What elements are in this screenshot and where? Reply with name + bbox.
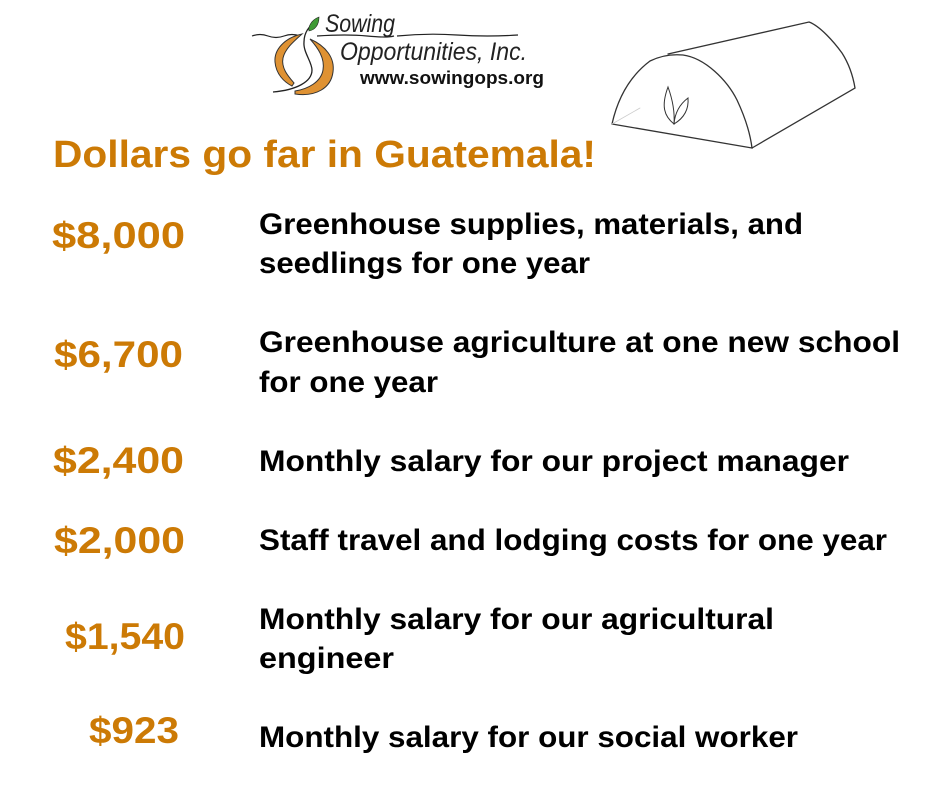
row: $2,000: Staff travel and lodging costs for one year — [259, 524, 887, 557]
row: $2,400: $2,400 — [53, 440, 184, 481]
icon: stem — [273, 20, 318, 92]
row: $2,000 — [54, 520, 887, 561]
row: $8,000 — [52, 208, 803, 280]
icon: left seed — [275, 34, 302, 86]
icon: right seed — [295, 39, 333, 95]
row: $8,000: Greenhouse supplies, materials, and — [259, 208, 803, 241]
logo: Sowing Opportunities, Inc. — [252, 10, 544, 95]
row: $6,700: Greenhouse agriculture at one new school — [259, 326, 900, 359]
row: $2,400: Monthly salary for our project manager — [259, 445, 849, 478]
illustration: greenhouse sketch — [612, 22, 855, 148]
row: $923: $923 — [89, 710, 179, 751]
row: $1,540: $1,540 — [65, 616, 185, 657]
row: $1,540: engineer — [259, 642, 394, 675]
row: $8,000: $8,000 — [52, 215, 185, 256]
row: $1,540: Monthly salary for our agricultural — [259, 603, 774, 636]
row: $923 — [89, 710, 798, 754]
title: Dollars go far in Guatemala! — [53, 134, 596, 176]
row: $2,000: $2,000 — [54, 520, 185, 561]
logo name: Sowing: Sowing — [325, 10, 395, 38]
logo name: Opportunities, Inc.: Opportunities, Inc. — [340, 38, 527, 66]
row: $923: Monthly salary for our social worker — [259, 721, 798, 754]
row: $1,540 — [65, 603, 774, 675]
website url: www.sowingops.org — [359, 68, 544, 88]
row: $8,000: seedlings for one year — [259, 247, 590, 280]
row: $6,700: for one year — [259, 366, 438, 399]
row: $2,400 — [53, 440, 849, 481]
icon: green leaf — [309, 17, 319, 31]
row: $6,700: $6,700 — [54, 334, 183, 375]
icon: sprout — [664, 87, 688, 124]
row: $6,700 — [54, 326, 900, 399]
